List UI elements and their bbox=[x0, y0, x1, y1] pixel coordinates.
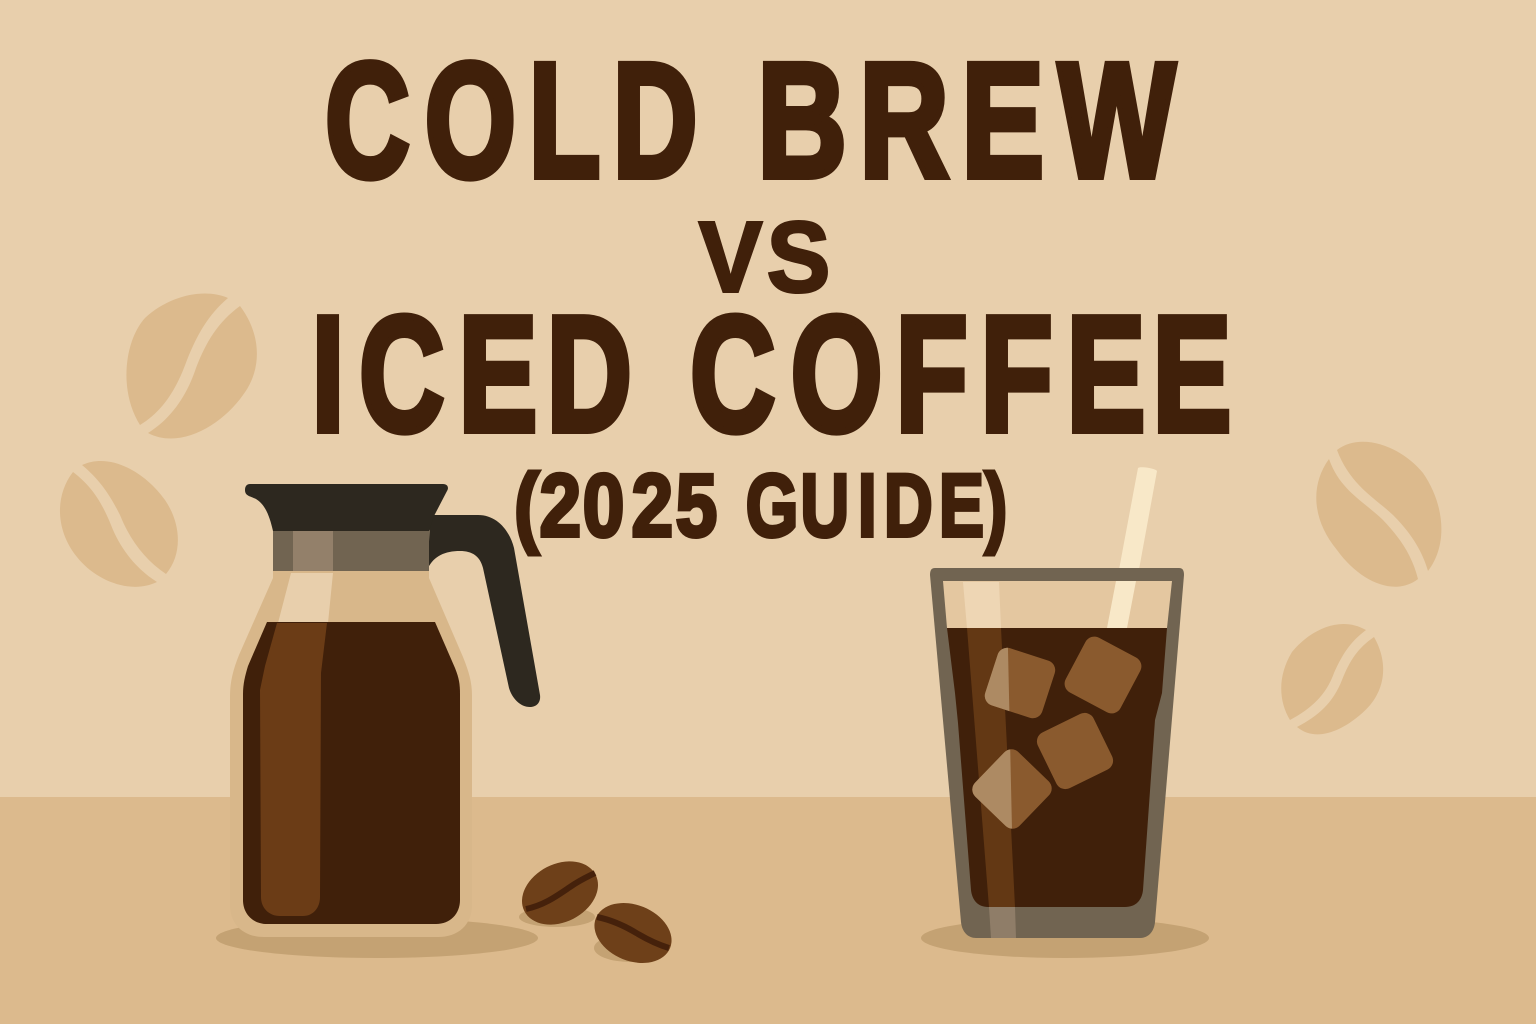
table surface bbox=[0, 797, 1536, 1024]
title word: brew: BREW bbox=[757, 29, 1176, 211]
carafe glass body bbox=[230, 570, 472, 937]
ice cube 3 bbox=[1034, 710, 1116, 792]
carafe lid bbox=[245, 484, 448, 531]
straw above rim bbox=[1118, 467, 1157, 575]
band highlight bbox=[293, 531, 333, 571]
glass outer bbox=[930, 568, 1184, 938]
bean shadow bbox=[519, 907, 595, 927]
cold brew carafe bbox=[230, 484, 540, 937]
glass highlight: coffee bbox=[967, 628, 1015, 907]
background wall bbox=[0, 0, 1536, 797]
decorative bean: lower left bbox=[60, 461, 178, 587]
glass highlight: top bbox=[963, 582, 1001, 628]
decorative bean: upper left bbox=[126, 294, 257, 439]
coffee bean on table: right bbox=[585, 892, 681, 974]
decorative bean: upper right bbox=[1316, 442, 1441, 587]
subtitle: 2025: (2025 bbox=[514, 457, 717, 555]
glass shadow bbox=[921, 918, 1209, 958]
coffee in glass bbox=[947, 628, 1167, 907]
carafe shadow bbox=[216, 918, 538, 958]
carafe band bbox=[273, 531, 429, 571]
coffee highlight bbox=[260, 623, 327, 916]
title bbox=[312, 29, 1231, 555]
straw inside glass bbox=[1107, 581, 1136, 628]
title line: iced coffee: ICED COFFEE bbox=[312, 284, 1231, 466]
decorative bean: lower right bbox=[1281, 624, 1383, 734]
subtitle: guide: GUIDE) bbox=[746, 455, 1007, 555]
bean shadow second bbox=[594, 934, 666, 962]
empty top of glass bbox=[943, 581, 1172, 628]
title word: cold: COLD bbox=[325, 30, 697, 212]
glass highlight above coffee bbox=[278, 573, 333, 623]
ice cube highlights bbox=[972, 648, 1012, 829]
coffee fill bbox=[243, 622, 460, 924]
ice cube 4 bbox=[968, 745, 1056, 833]
coffee bean on table: left bbox=[511, 849, 609, 937]
ice cube 1 bbox=[982, 645, 1058, 721]
glass highlight: base bbox=[989, 907, 1016, 938]
iced coffee glass bbox=[930, 467, 1184, 938]
title line: vs: VS bbox=[699, 201, 830, 313]
ice cube 2 bbox=[1061, 633, 1145, 717]
carafe handle bbox=[428, 515, 540, 707]
